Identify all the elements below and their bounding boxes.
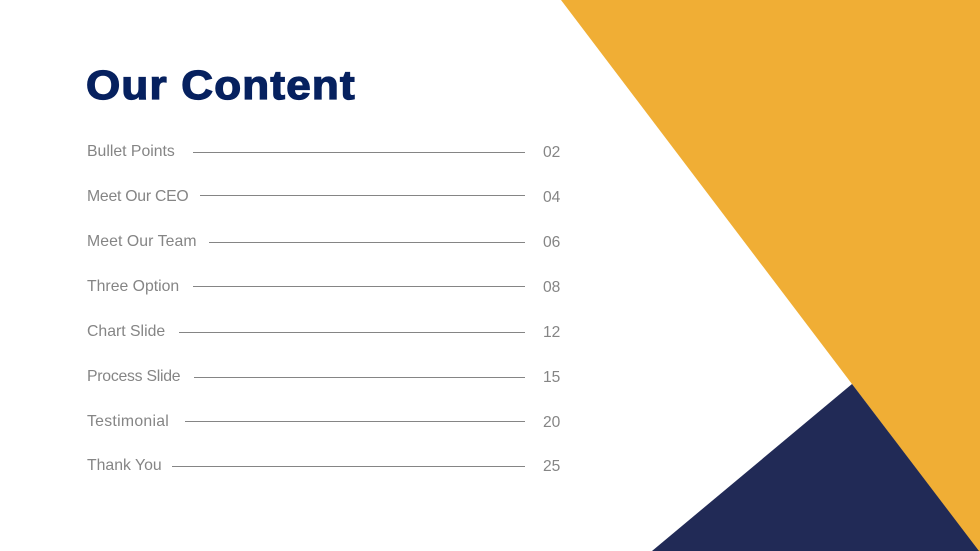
yellow triangle [561, 0, 980, 551]
contents row: Three Option 08: 08 [543, 279, 560, 296]
contents row: Chart Slide 12 [87, 323, 560, 341]
contents row: Meet Our CEO 04: Meet Our CEO [87, 188, 188, 205]
contents row: Thank You 25 [87, 457, 560, 475]
contents row: Three Option 08: Three Option [87, 278, 179, 295]
contents row: Process Slide 15 [87, 368, 560, 386]
contents row: Bullet Points 02 [87, 143, 560, 161]
contents row: Three Option 08 [87, 278, 560, 296]
contents row: Testimonial 20 [87, 413, 560, 431]
contents row: Meet Our Team 06: 06 [543, 234, 560, 251]
contents row: Bullet Points 02: 02 [543, 144, 560, 161]
title: Our Content [86, 63, 356, 108]
contents row: Chart Slide 12: 12 [543, 324, 560, 341]
navy triangle [652, 384, 979, 551]
contents row: Meet Our CEO 04 [87, 188, 560, 206]
contents row: Thank You 25: 25 [543, 458, 560, 475]
contents row: Meet Our CEO 04: 04 [543, 189, 560, 206]
contents row: Process Slide 15: 15 [543, 369, 560, 386]
contents row: Meet Our Team 06 [87, 233, 560, 251]
contents row: Testimonial 20: 20 [543, 414, 560, 431]
contents row: Testimonial 20: Testimonial [87, 413, 169, 430]
contents row: Chart Slide 12: Chart Slide [87, 323, 165, 340]
contents row: Bullet Points 02: Bullet Points [87, 143, 175, 160]
contents row: Thank You 25: Thank You [87, 457, 162, 474]
contents row: Meet Our Team 06: Meet Our Team [87, 233, 197, 250]
contents row: Process Slide 15: Process Slide [87, 368, 180, 385]
